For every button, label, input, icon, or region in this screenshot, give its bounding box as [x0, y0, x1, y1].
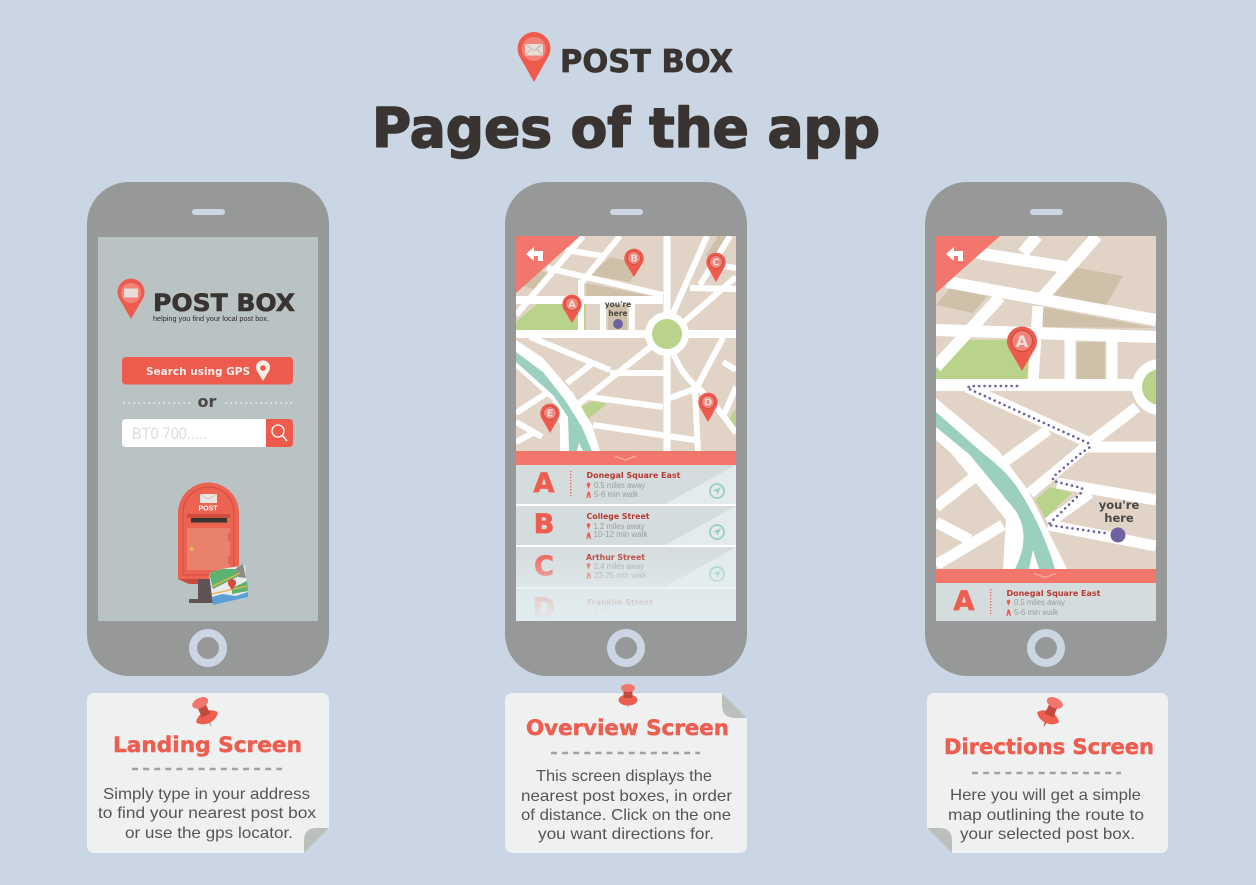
note: overview screen: This screen displays the [536, 768, 712, 785]
row C: Arthur Street [586, 553, 645, 562]
pushpin [1033, 693, 1068, 732]
map marker: C [706, 253, 726, 282]
map marker: B [624, 249, 644, 277]
note: overview screen: of distance. Click on the one [521, 807, 731, 824]
selected result panel: A [954, 586, 975, 617]
map marker: E: E [547, 408, 554, 420]
map marker: B: B [630, 254, 638, 264]
you are here: overview: here [608, 309, 628, 318]
map: directions [936, 236, 1156, 569]
you are here: overview: you're [605, 300, 631, 309]
landing logo: POST BOX [153, 289, 296, 317]
note: overview screen: you want directions for. [538, 826, 714, 843]
map marker: D [698, 393, 718, 422]
search input [122, 419, 293, 447]
row B: College Street [586, 512, 650, 521]
map marker: A large [1007, 326, 1037, 371]
logo: post box header [518, 32, 733, 82]
selected result panel [936, 569, 1156, 621]
button: search using GPS: Search using GPS [146, 365, 250, 378]
map marker: D: D [704, 398, 712, 408]
back corner [516, 236, 580, 293]
selected result panel: Donegal Square East [1006, 589, 1101, 598]
note: landing screen: Landing Screen [113, 733, 302, 757]
title: Pages of the app [372, 97, 880, 160]
row B: 1.2 miles away [594, 522, 644, 531]
landing logo [118, 279, 296, 323]
row D [516, 589, 736, 616]
row A: 5-6 min walk [594, 490, 639, 499]
note: overview screen: Overview Screen [526, 716, 729, 740]
phone: overview screen [505, 182, 747, 676]
results list [516, 451, 736, 624]
note: directions screen: your selected post box. [960, 826, 1135, 843]
row D: 3 miles away [594, 607, 634, 616]
selected result panel: 5-6 min walk [1014, 608, 1059, 617]
note: directions screen: map outlining the route to [948, 807, 1144, 824]
search input: BT0 700..... [132, 424, 207, 443]
river with white banks [936, 398, 1067, 569]
you are here: directions [1099, 498, 1139, 542]
map marker: A: A [568, 300, 576, 310]
note: landing screen: to find your nearest post box [98, 805, 316, 822]
note: directions screen [927, 693, 1168, 853]
row B: 10-12 min walk [594, 530, 648, 539]
row D: Franklin Street [587, 598, 653, 607]
note: overview screen: nearest post boxes, in order [521, 788, 733, 805]
row C [516, 547, 736, 587]
row A [516, 465, 736, 504]
note: directions screen: Directions Screen [944, 735, 1154, 759]
back corner [936, 236, 1000, 293]
illustration: red post box with map: POST [198, 506, 218, 512]
you are here: overview [605, 300, 631, 329]
note: directions screen: Here you will get a simple [950, 787, 1141, 804]
row A: 0.5 miles away [594, 481, 645, 490]
walking route [967, 386, 1105, 533]
selected result panel: 0.5 miles away [1014, 598, 1065, 607]
note: overview screen [505, 684, 747, 853]
illustration: red post box with map [178, 482, 248, 605]
row C: C [534, 551, 554, 582]
row A: A [534, 468, 555, 499]
note: landing screen: Simply type in your address [103, 786, 310, 803]
map marker: E [540, 404, 560, 433]
pushpin [618, 684, 638, 708]
row B [516, 506, 736, 545]
pushpin [187, 693, 222, 732]
note: landing screen [87, 693, 329, 853]
row C: 23-25 min walk [594, 571, 648, 580]
river with white banks [516, 340, 600, 451]
landing logo: helping you find your local post box. [153, 316, 269, 323]
you are here: directions: here [1104, 511, 1134, 525]
map marker: A [562, 295, 582, 323]
infographic canvas [87, 32, 1168, 853]
or divider: or [198, 392, 217, 411]
note: landing screen: or use the gps locator. [125, 825, 293, 842]
map marker: A large: A [1016, 332, 1029, 351]
map: overview [516, 236, 736, 451]
row B: B [534, 509, 554, 540]
you are here: directions: you're [1099, 498, 1139, 512]
row A: Donegal Square East [586, 471, 681, 480]
phone: landing screen [87, 182, 329, 676]
map marker: C: C [712, 258, 720, 268]
row D: D [533, 593, 555, 624]
logo: post box header: POST BOX [560, 44, 733, 80]
phone: directions screen [925, 182, 1188, 676]
button: search using GPS [122, 357, 293, 384]
row C: 2.4 miles away [594, 562, 644, 571]
